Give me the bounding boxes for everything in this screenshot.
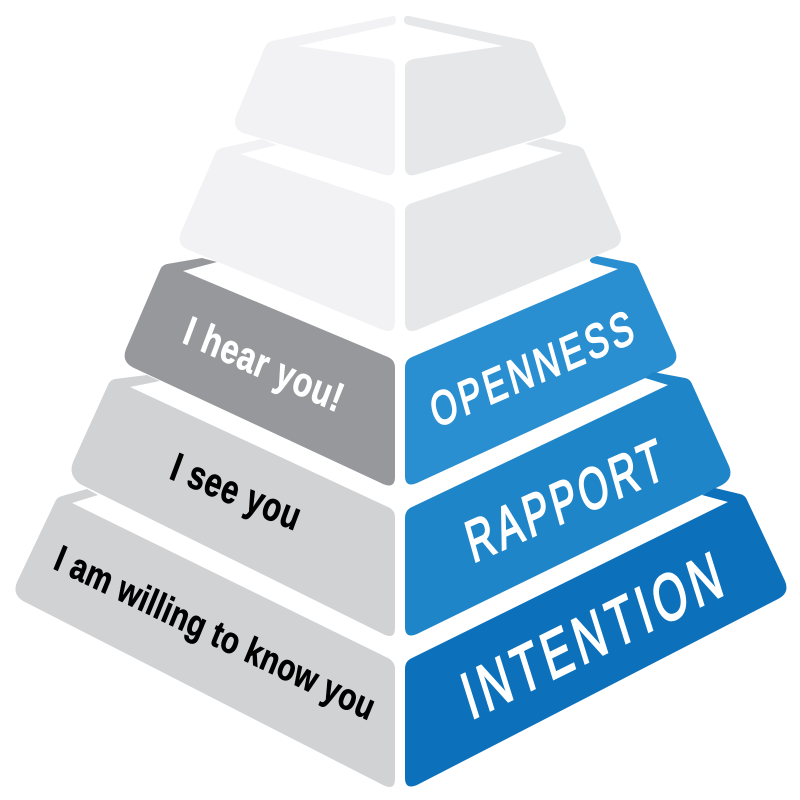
panel: top tier left face bbox=[235, 16, 396, 175]
panel: intention tier bbox=[405, 488, 786, 786]
panel: I hear you tier bbox=[125, 258, 395, 485]
panel: openness tier bbox=[405, 256, 676, 484]
panel: rapport tier bbox=[405, 372, 730, 635]
text: openness: OPENNESS bbox=[424, 298, 642, 438]
panel: I see you tier bbox=[72, 375, 395, 636]
text: rapport: RAPPORT bbox=[459, 426, 674, 576]
text: I hear you: I hear you! bbox=[178, 307, 351, 421]
panel: second tier right face bbox=[405, 138, 621, 331]
panel: top tier right face bbox=[404, 16, 566, 175]
text: I see you: I see you bbox=[165, 445, 308, 540]
text: I am willing to know you: I am willing to know you bbox=[49, 537, 381, 728]
panel: I am willing to know you tier bbox=[15, 489, 395, 787]
panel: second tier left face bbox=[180, 139, 395, 331]
